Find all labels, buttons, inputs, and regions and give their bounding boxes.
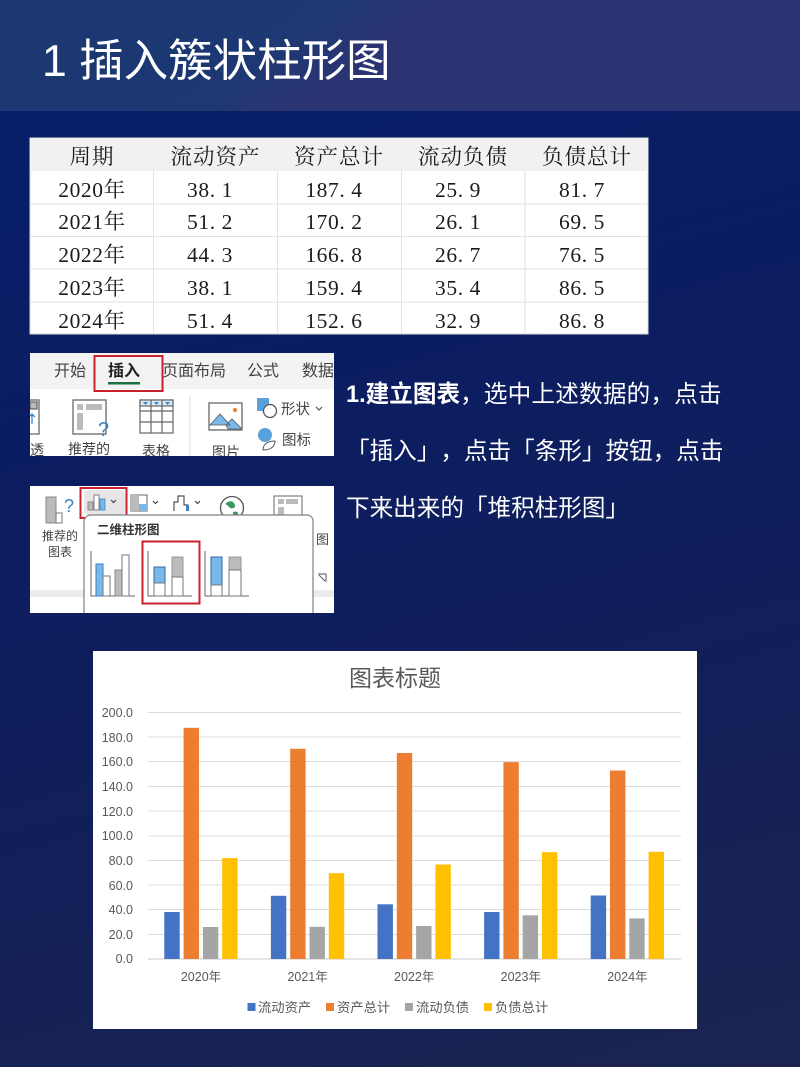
y axis labels: 180.0 <box>102 731 133 745</box>
y axis labels: 140.0 <box>102 780 133 794</box>
icon: column chart button <box>84 490 125 515</box>
screenshot: insert ribbon: 图片 <box>212 444 240 460</box>
table header: 周期 <box>69 145 115 169</box>
table rows: 187. 4 <box>305 178 363 202</box>
icon: dialog launcher <box>318 574 326 582</box>
table rows: 26. 1 <box>435 210 481 234</box>
table rows: 2020年 <box>58 178 126 202</box>
table rows: 86. 5 <box>559 276 605 300</box>
legend: 负债总计 <box>495 1000 548 1015</box>
screenshot: chart type dropdown: 图 <box>316 532 329 547</box>
table header <box>69 145 632 169</box>
y axis labels: 100.0 <box>102 829 133 843</box>
table rows: 69. 5 <box>559 210 605 234</box>
chart title: 图表标题 <box>349 665 441 691</box>
table rows: 35. 4 <box>435 276 481 300</box>
table rows: 2021年 <box>58 210 126 234</box>
table rows: 2022年 <box>58 243 126 267</box>
screenshot: chart type dropdown <box>30 486 334 613</box>
legend: 资产总计 <box>337 1000 390 1015</box>
icon: table <box>140 400 173 433</box>
table rows: 26. 7 <box>435 243 481 267</box>
icon: stacked column <box>148 551 192 596</box>
y axis labels: 60.0 <box>109 879 133 893</box>
screenshot: insert ribbon: 页面布局 <box>162 362 226 380</box>
table rows: 38. 1 <box>187 178 233 202</box>
dropdown popup <box>84 515 313 613</box>
table rows: 51. 2 <box>187 210 233 234</box>
legend: 流动负债 <box>416 1000 469 1015</box>
series: 流动负债 <box>203 915 645 959</box>
y axis labels <box>102 706 133 966</box>
chart panel <box>93 651 697 1029</box>
table rows: 86. 8 <box>559 309 605 333</box>
table header: 流动资产 <box>170 145 261 169</box>
x axis labels: 2022年 <box>394 970 434 984</box>
icon: icons <box>258 428 275 450</box>
y axis labels: 0.0 <box>116 952 133 966</box>
x axis labels: 2023年 <box>501 970 541 984</box>
instruction text: 1.建立图表，选中上述数据的，点击 <box>346 381 722 408</box>
icon: 100% stacked column <box>205 551 249 596</box>
icon: recommended table: ? <box>98 419 109 441</box>
icon: clustered column <box>91 551 135 596</box>
dropdown title: 二维柱形图 <box>97 522 160 537</box>
icon: recommended charts: ? <box>64 496 74 516</box>
instruction text: 「插入」，点击「条形」按钮，点击 <box>346 438 724 465</box>
y axis labels: 160.0 <box>102 755 133 769</box>
table rows: 2024年 <box>58 309 126 333</box>
icon: pivot table clip <box>29 400 39 434</box>
y axis labels: 120.0 <box>102 805 133 819</box>
screenshot: chart type dropdown: 图表 <box>48 545 72 559</box>
screenshot: insert ribbon: 插入 <box>108 361 140 380</box>
table rows: 44. 3 <box>187 243 233 267</box>
instruction text <box>346 381 724 522</box>
legend <box>248 1000 548 1015</box>
x axis labels: 2021年 <box>287 970 328 984</box>
table rows: 2023年 <box>58 276 126 300</box>
icon: picture <box>209 403 242 430</box>
screenshot: insert ribbon: 推荐的 <box>68 441 110 457</box>
screenshot: insert ribbon: 表格 <box>142 443 170 459</box>
x axis labels: 2024年 <box>607 970 648 984</box>
table rows: 32. 9 <box>435 309 481 333</box>
table rows: 38. 1 <box>187 276 233 300</box>
data table <box>30 138 648 334</box>
icon: shapes <box>257 398 276 418</box>
legend: 流动资产 <box>258 1000 311 1015</box>
table rows: 25. 9 <box>435 178 481 202</box>
screenshot: insert ribbon: 数据 <box>302 362 334 380</box>
screenshot: insert ribbon <box>30 353 334 460</box>
screenshot: insert ribbon: 形状 <box>281 401 310 418</box>
screenshot: insert ribbon: 图标 <box>282 432 311 449</box>
title: 1 插入簇状柱形图 <box>42 37 391 86</box>
icon: recommended charts <box>46 496 74 523</box>
icon: hierarchy chart <box>131 495 158 511</box>
screenshot: chart type dropdown: 推荐的 <box>42 528 78 543</box>
icon: map table <box>274 496 302 524</box>
icon: waterfall chart <box>174 496 200 511</box>
table header: 负债总计 <box>542 145 632 169</box>
y axis labels: 40.0 <box>109 903 133 917</box>
screenshot: insert ribbon: 公式 <box>247 362 279 380</box>
table rows: 76. 5 <box>559 243 605 267</box>
table rows <box>58 178 605 333</box>
screenshot: insert ribbon: 开始 <box>54 362 86 380</box>
instruction text: 下来出来的「堆积柱形图」 <box>346 495 629 522</box>
series: 负债总计 <box>222 852 664 959</box>
icon: recommended table <box>73 400 109 441</box>
icon: globe <box>220 496 244 520</box>
table rows: 159. 4 <box>305 276 363 300</box>
x axis labels: 2020年 <box>181 970 221 984</box>
y axis labels: 200.0 <box>102 706 133 720</box>
series: 资产总计 <box>184 728 625 959</box>
series: 流动资产 <box>164 896 606 959</box>
title band <box>0 0 800 111</box>
screenshot: insert ribbon: 透 <box>30 442 44 458</box>
y axis labels: 20.0 <box>109 928 133 942</box>
y axis labels: 80.0 <box>109 854 133 868</box>
x axis labels <box>181 970 648 984</box>
table rows: 81. 7 <box>559 178 605 202</box>
table rows: 166. 8 <box>305 243 363 267</box>
table header: 流动负债 <box>418 145 508 169</box>
table header: 资产总计 <box>294 145 384 169</box>
table rows: 152. 6 <box>305 309 363 333</box>
table rows: 170. 2 <box>305 210 363 234</box>
table rows: 51. 4 <box>187 309 233 333</box>
